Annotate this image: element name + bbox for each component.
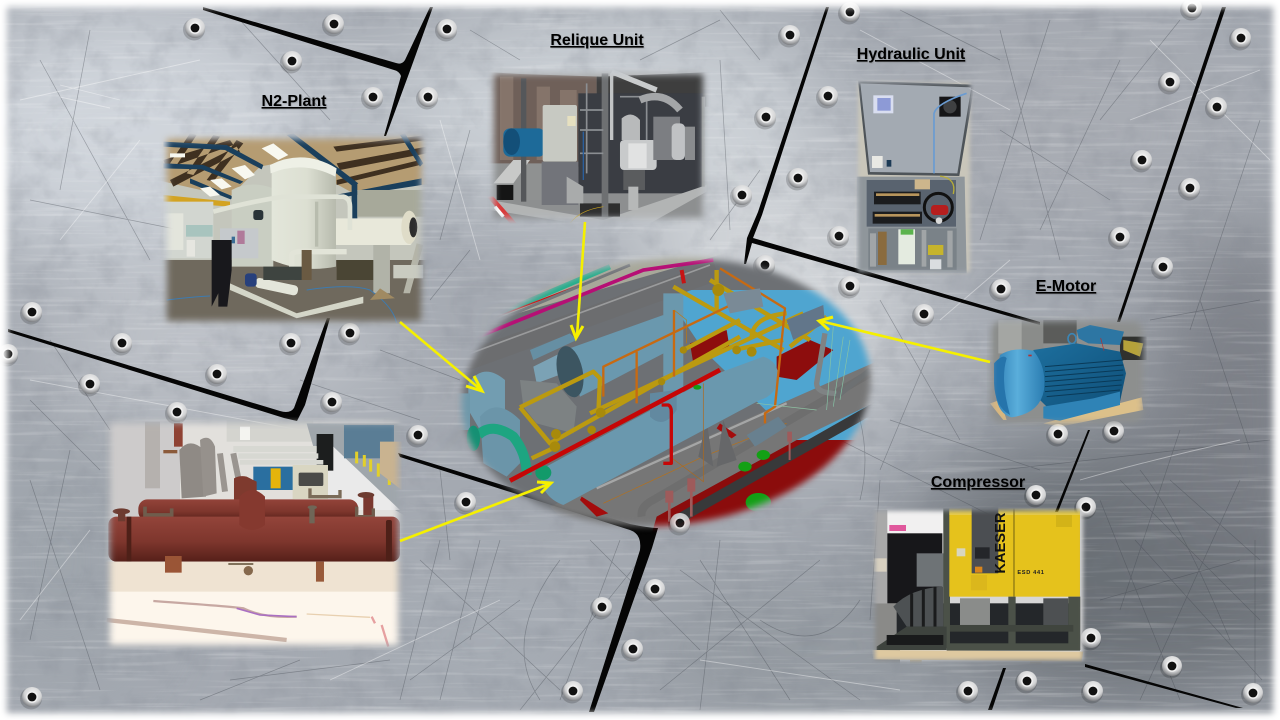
model motor box <box>787 305 825 340</box>
model left vessels <box>457 372 520 477</box>
model grey floor <box>550 360 880 540</box>
model gold pipework <box>520 270 827 458</box>
photo: Compressor: KAESER <box>993 512 1009 574</box>
model red pipe <box>510 370 720 481</box>
model top backdrop <box>450 250 880 317</box>
model green pads <box>693 385 771 512</box>
photo: Compressor: ESD 441 <box>1017 570 1045 576</box>
rivet over center model <box>668 513 690 536</box>
model rear vessel <box>520 293 683 433</box>
photo: Relique Unit <box>487 67 713 227</box>
model front vessel <box>540 357 778 505</box>
photo: heat exchanger vessels <box>103 417 407 650</box>
model pink valves <box>665 432 792 522</box>
model green elbow <box>478 429 527 475</box>
photo: Hydraulic Unit <box>853 77 980 277</box>
arrow: vessels to model <box>400 482 551 541</box>
photo: E-Motor <box>987 313 1150 427</box>
photo: N2-Plant <box>157 130 433 330</box>
label: Relique Unit: Relique Unit <box>550 32 644 49</box>
model red grating <box>690 330 833 380</box>
model blue floor right <box>683 290 873 440</box>
arrow: N2-Plant to model <box>400 322 482 391</box>
model top pipes <box>474 258 714 353</box>
label: Compressor: Compressor <box>931 474 1025 491</box>
label: N2-Plant: N2-Plant <box>262 93 327 110</box>
arrow: Relique Unit to model <box>571 222 585 338</box>
arrow: E-Motor to model <box>819 317 990 362</box>
label: E-Motor: E-Motor <box>1036 278 1096 295</box>
photo: Compressor <box>872 508 1086 663</box>
label: Hydraulic Unit: Hydraulic Unit <box>857 46 966 63</box>
model red deck <box>653 440 854 530</box>
model right pipes <box>757 327 870 410</box>
model orange pipework <box>603 268 785 423</box>
center 3D plant model <box>450 250 880 540</box>
